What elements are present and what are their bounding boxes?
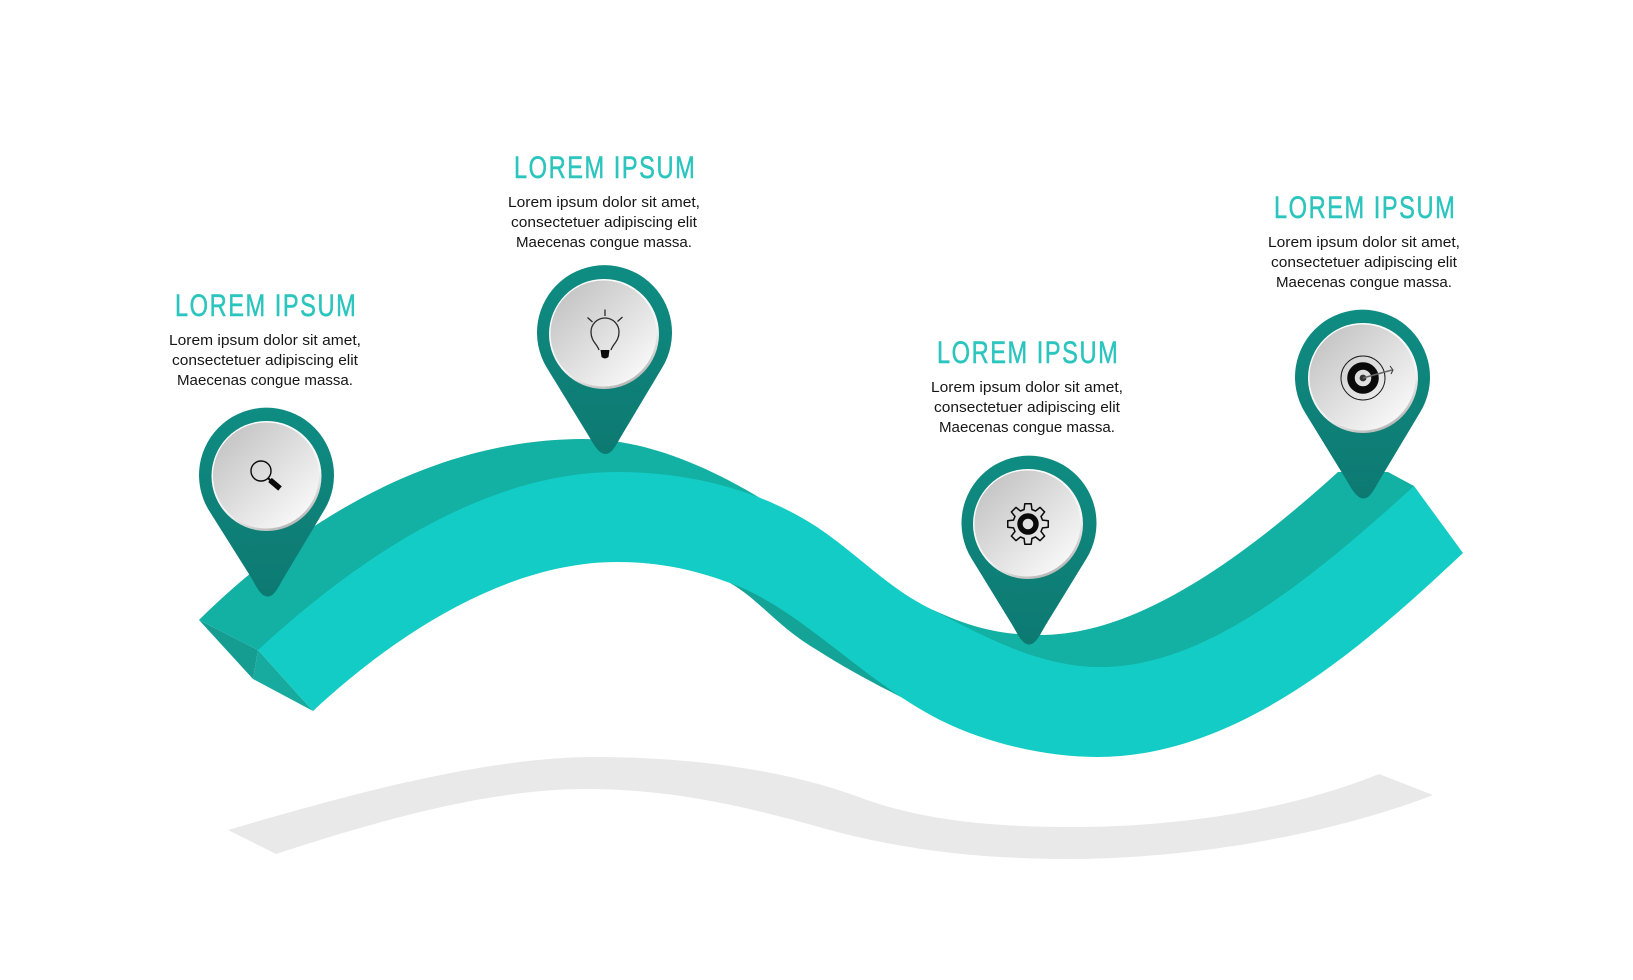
ribbon left end face, lower facet — [253, 650, 313, 711]
body text 1: Maecenas congue massa. — [177, 373, 353, 389]
step 4 — [1268, 190, 1460, 498]
body text 2: consectetuer adipiscing elit — [511, 215, 697, 231]
pin 1 — [199, 408, 334, 596]
body text 4: consectetuer adipiscing elit — [1271, 255, 1457, 271]
icon: light bulb — [588, 310, 622, 358]
heading 4: LOREM IPSUM — [1274, 190, 1455, 225]
body text 1 — [169, 333, 361, 389]
body text 3: Maecenas congue massa. — [939, 420, 1115, 436]
body text 4: Maecenas congue massa. — [1276, 275, 1452, 291]
icon: target with arrow — [1341, 356, 1393, 400]
step 2 — [508, 150, 700, 454]
ribbon underside sliver — [730, 583, 905, 699]
body text 2: Lorem ipsum dolor sit amet, — [508, 195, 700, 211]
step 1 — [169, 288, 361, 596]
pin 3 — [962, 456, 1096, 644]
icon: gear — [1008, 504, 1048, 544]
body text 3: consectetuer adipiscing elit — [934, 400, 1120, 416]
body text 1: consectetuer adipiscing elit — [172, 353, 358, 369]
body text 4 — [1268, 235, 1460, 291]
body text 1: Lorem ipsum dolor sit amet, — [169, 333, 361, 349]
body text 2: Maecenas congue massa. — [516, 235, 692, 251]
pin 4 — [1295, 310, 1430, 498]
pin 2 — [537, 265, 672, 454]
ribbon rear face, right rise — [933, 472, 1425, 710]
ribbon left end face, upper facet — [199, 620, 258, 679]
ground shadow of ribbon — [228, 757, 1433, 859]
body text 4: Lorem ipsum dolor sit amet, — [1268, 235, 1460, 251]
heading 3: LOREM IPSUM — [937, 335, 1118, 370]
body text 2 — [508, 195, 700, 251]
ribbon front face — [258, 472, 1463, 757]
body text 3 — [931, 380, 1123, 436]
body text 3: Lorem ipsum dolor sit amet, — [931, 380, 1123, 396]
wave ribbon — [199, 439, 1463, 757]
step 3 — [931, 335, 1123, 644]
ribbon rear face, left crest — [199, 439, 760, 650]
icon: magnifying glass — [251, 461, 280, 488]
heading 1: LOREM IPSUM — [175, 288, 356, 323]
heading 2: LOREM IPSUM — [514, 150, 695, 185]
